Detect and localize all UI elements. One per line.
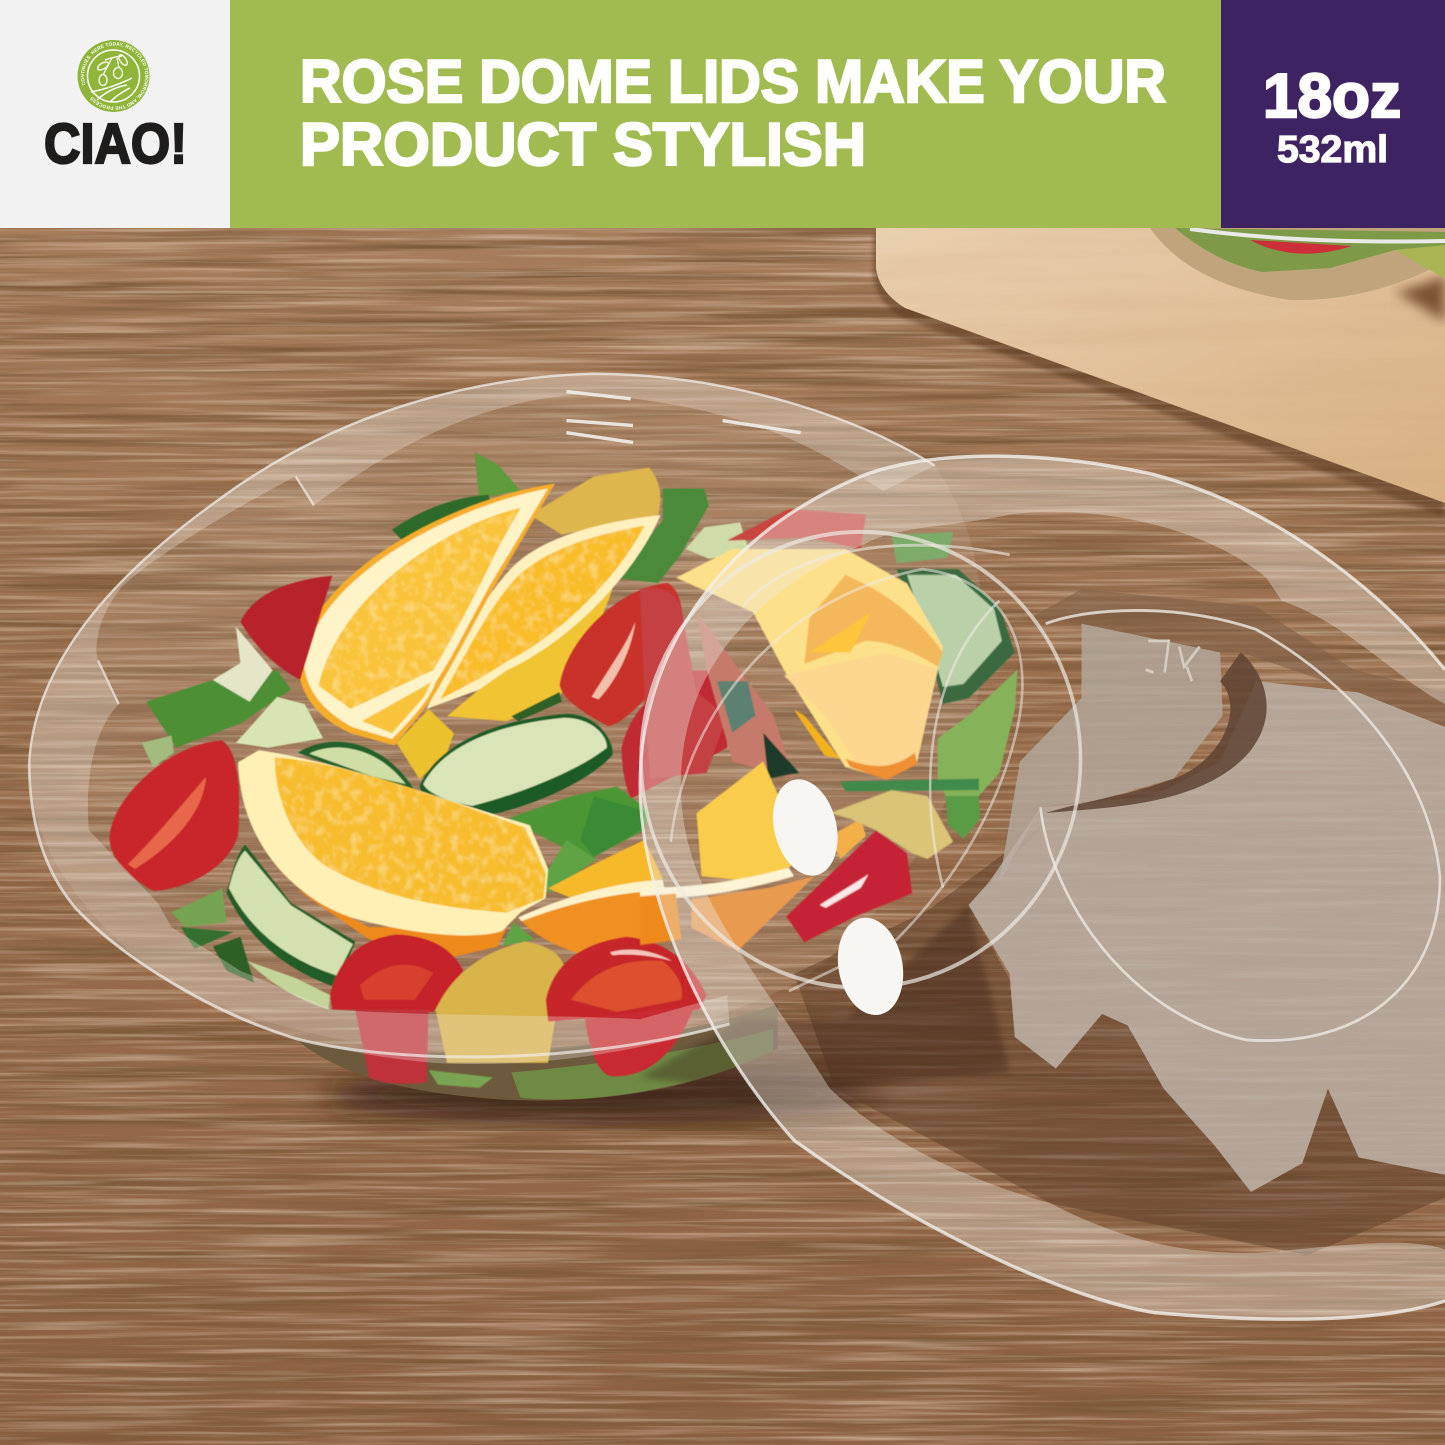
bowl rim lines xyxy=(29,374,935,1057)
bowl shadow on table xyxy=(320,1065,880,1125)
lid inner dome ring xyxy=(641,532,1440,1041)
lid outer bands xyxy=(640,456,1445,1319)
title text: PRODUCT STYLISH xyxy=(300,111,866,178)
clear salad bowl xyxy=(29,374,983,1101)
title text xyxy=(300,48,1166,178)
cucumber slices xyxy=(227,697,613,1009)
orange wedge front xyxy=(238,750,548,957)
lettuce under lid xyxy=(840,670,1017,839)
bowl body below rim xyxy=(296,1005,778,1101)
back yellow tomato xyxy=(530,468,660,534)
clear rose dome lid xyxy=(640,456,1445,1319)
lower orange under lid xyxy=(640,761,866,951)
salad contents xyxy=(110,452,750,1088)
logo badge: CONTINUES. HERE TODAY, RECYCLED TOMORROW, AND THE PROCESS xyxy=(80,42,149,110)
lettuce leaves xyxy=(142,452,750,983)
orange wedge rear xyxy=(426,515,661,709)
title text: ROSE DOME LIDS MAKE YOUR xyxy=(300,48,1166,115)
header bar xyxy=(0,0,1445,228)
pale squash under lid xyxy=(830,790,953,859)
bowl interior tint xyxy=(29,374,983,1053)
logo panel xyxy=(0,0,230,228)
cutting board with second bowl xyxy=(870,228,1445,516)
size panel xyxy=(1221,0,1445,228)
tomatoes xyxy=(110,576,727,1088)
red pepper xyxy=(786,830,912,942)
bowl rim band xyxy=(29,374,935,1064)
washed out tomato and greens xyxy=(640,509,1015,779)
orange wedge lower right xyxy=(518,840,681,954)
table seen through lid xyxy=(640,589,1445,1255)
size in ounces: 18oz xyxy=(1263,62,1401,131)
orange wedge top xyxy=(298,484,555,745)
title panel xyxy=(230,0,1221,228)
size in millilitres: 532ml xyxy=(1277,129,1388,171)
embossed mark xyxy=(1146,641,1200,681)
logo wordmark: CIAO! xyxy=(44,112,187,176)
yellow rinds under oranges xyxy=(447,581,615,721)
washed out orange slice xyxy=(676,549,943,780)
salad seen through lid xyxy=(640,509,1017,951)
white glare highlights xyxy=(762,770,912,1023)
